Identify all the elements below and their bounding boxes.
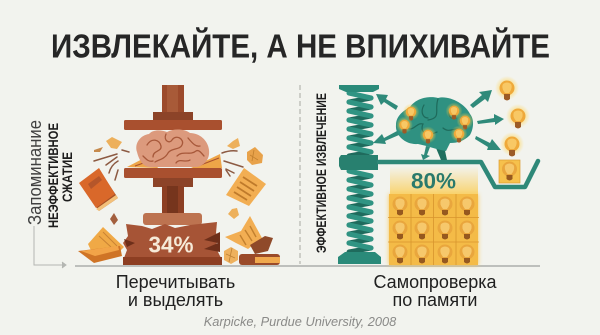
icon: sheet of paper bbox=[226, 168, 266, 206]
icon: book stack right bbox=[239, 254, 280, 265]
arrow to spring lower bbox=[373, 131, 399, 144]
squeezed pages bbox=[127, 154, 222, 168]
base bbox=[338, 252, 381, 264]
arrow to lower bulb bbox=[475, 136, 501, 150]
upper coils bbox=[349, 93, 371, 156]
icon: paper scraps left bbox=[94, 137, 122, 225]
icon: paper right top bbox=[227, 138, 263, 165]
stack body bbox=[389, 194, 478, 265]
panel: bulb stack bbox=[388, 166, 479, 265]
axis label: memorization: Запоминание bbox=[25, 120, 45, 225]
press upper column bbox=[124, 85, 222, 130]
label: ineffective compression bbox=[46, 123, 75, 228]
icon: flying bulbs bbox=[495, 76, 530, 156]
icon: brain bbox=[136, 129, 209, 167]
slider block bbox=[339, 155, 378, 170]
percentage: 80% bbox=[411, 168, 456, 194]
source: Karpicke, Purdue University, 2008 bbox=[204, 314, 397, 329]
caption: self testing: по памяти bbox=[393, 290, 477, 310]
icon: open book right bbox=[225, 216, 273, 254]
arrow to top bulb bbox=[470, 90, 492, 108]
flying debris lines bbox=[94, 150, 243, 180]
lever tray bbox=[379, 161, 538, 187]
panel divider bbox=[299, 85, 301, 264]
baseline bbox=[75, 265, 540, 267]
bulb grid bbox=[388, 194, 479, 265]
press lower column bbox=[124, 168, 222, 225]
caption: self testing: Самопроверка bbox=[373, 272, 498, 292]
label: ineffective compression: СЖАТИЕ bbox=[60, 152, 75, 202]
top cap bbox=[339, 85, 379, 92]
icon: scrap and crumpled paper right bbox=[224, 208, 239, 264]
label: ineffective compression: НЕЭФФЕКТИВНОЕ bbox=[46, 123, 61, 228]
icon: bulb in tray bbox=[499, 160, 520, 183]
memory axis bbox=[34, 226, 66, 268]
icon: orange book bbox=[79, 168, 118, 211]
label: effective retrieval: ЭФФЕКТИВНОЕ ИЗВЛЕЧЕНИЕ bbox=[314, 93, 329, 253]
icon: books pile left bbox=[78, 227, 124, 263]
arrow to spring top bbox=[376, 94, 398, 110]
glow above stack bbox=[390, 166, 478, 196]
arrow down bbox=[421, 146, 430, 160]
lower coils bbox=[349, 171, 371, 252]
panel: spring bbox=[338, 85, 381, 264]
caption: rereading: и выделять bbox=[128, 290, 223, 310]
arrow to middle bulb bbox=[477, 114, 504, 125]
icon: brain with bulbs bbox=[396, 97, 473, 160]
arrows from brain bbox=[373, 90, 504, 160]
caption: rereading: Перечитывать bbox=[116, 272, 235, 292]
bulbs in brain bbox=[396, 102, 473, 144]
percentage: 34% bbox=[148, 232, 194, 258]
glow around stack bbox=[389, 194, 478, 265]
broken pedestal bbox=[123, 222, 222, 265]
panel: press bbox=[123, 85, 222, 265]
